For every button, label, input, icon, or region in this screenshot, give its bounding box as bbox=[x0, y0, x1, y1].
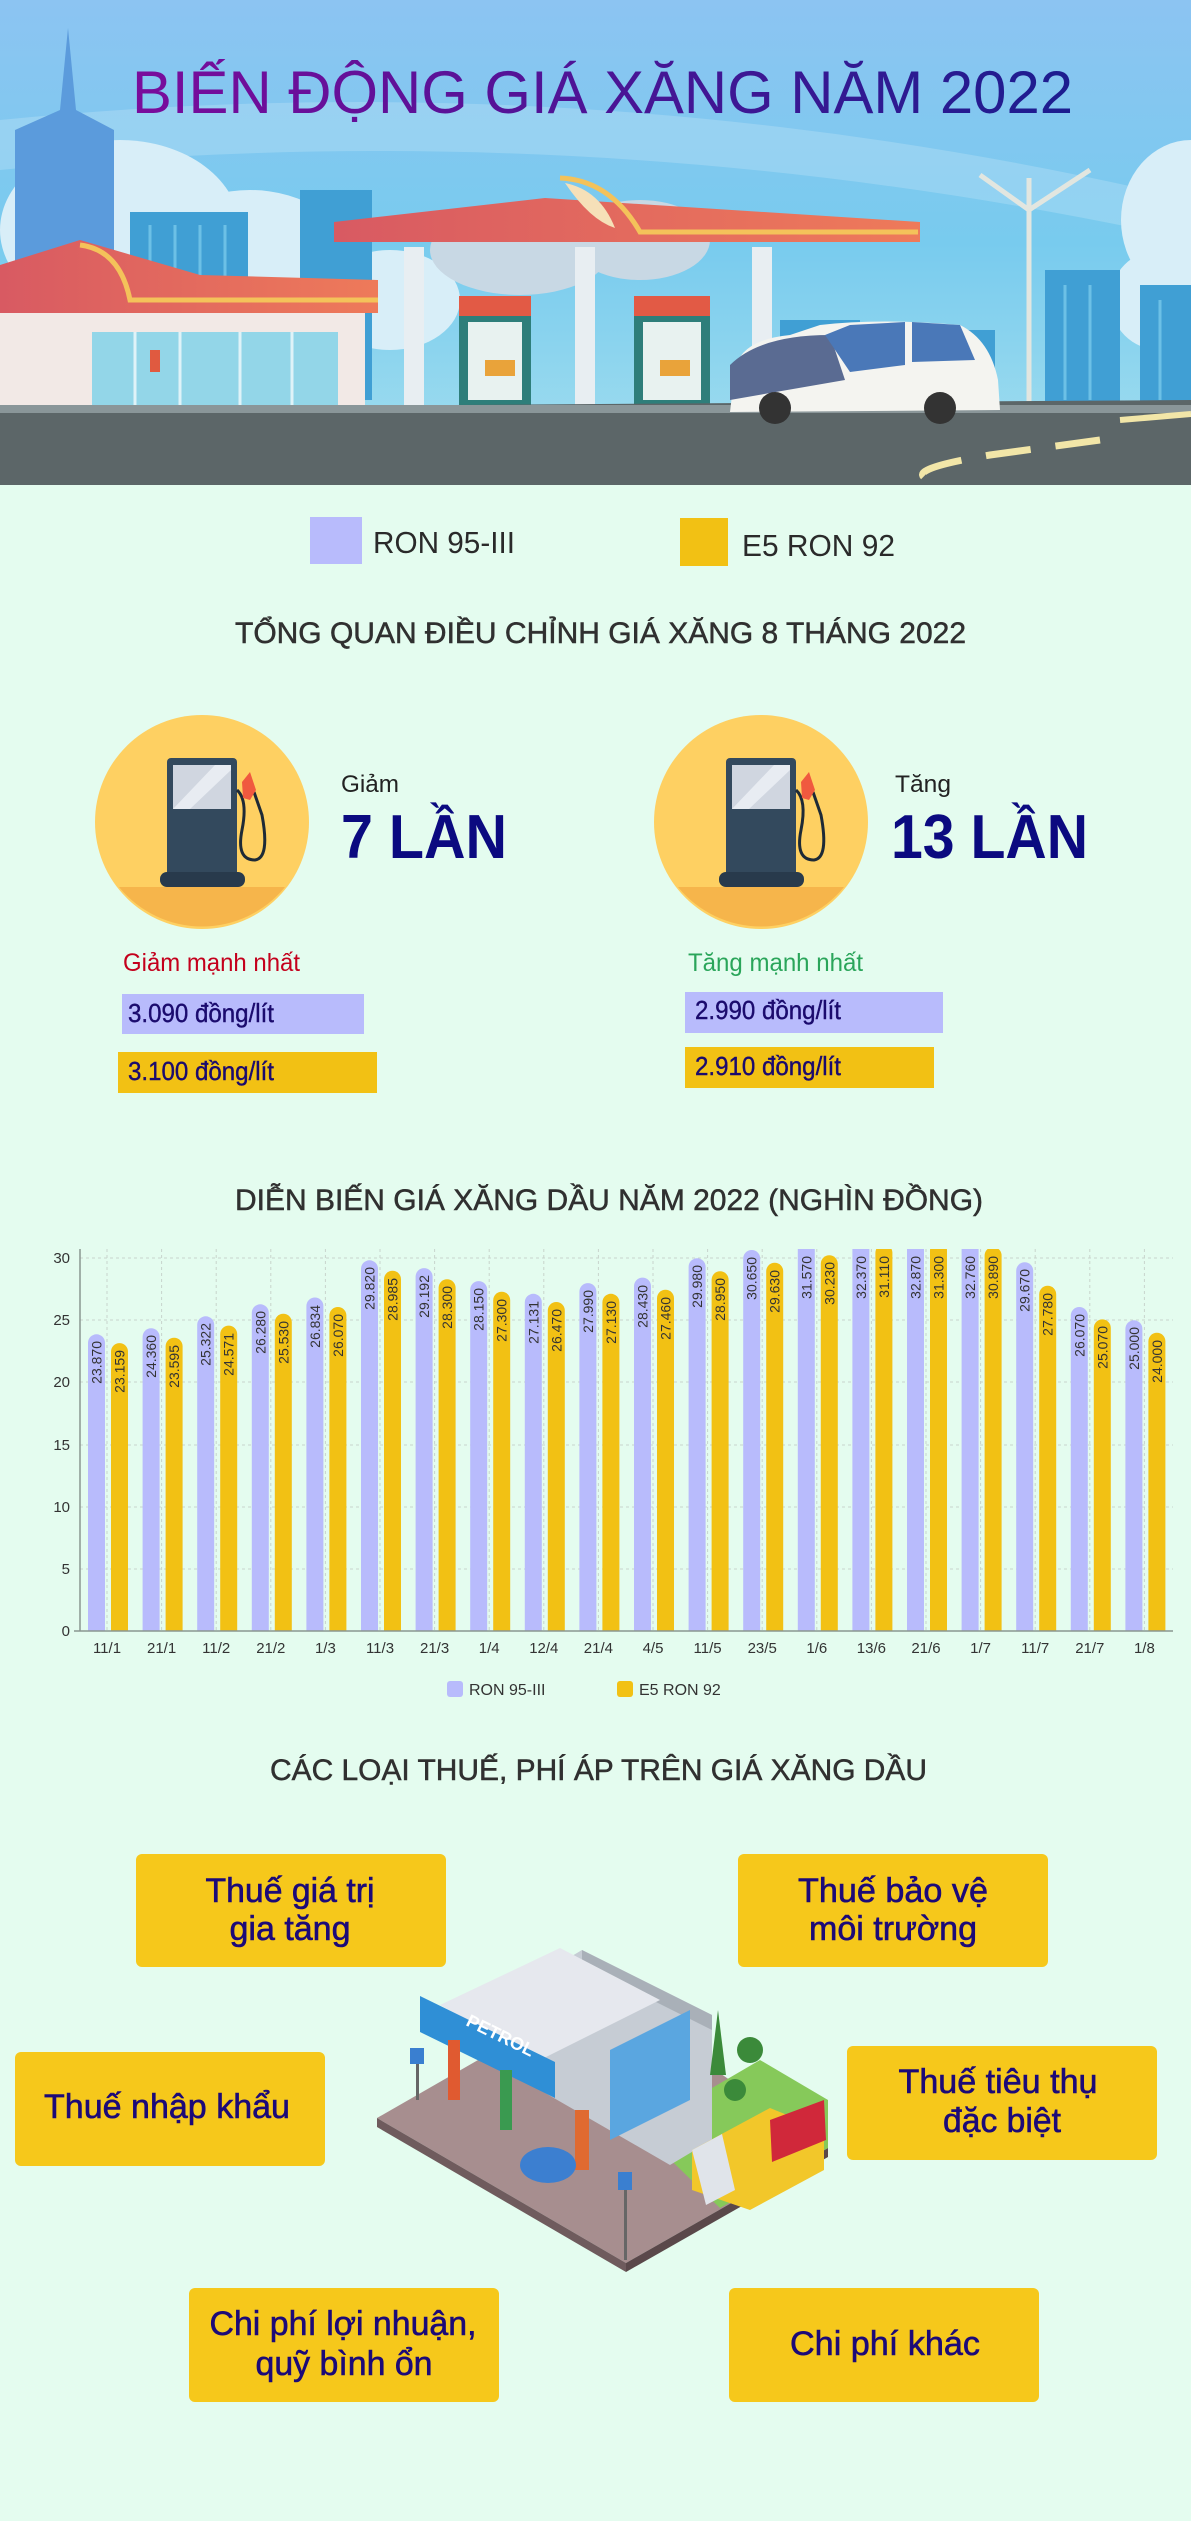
header illustration bbox=[0, 0, 1191, 487]
bar chart: 10 bbox=[53, 1499, 70, 1516]
illustration: isometric petrol station: PETROL bbox=[463, 2011, 538, 2061]
bar chart: 11/1 bbox=[93, 1640, 121, 1657]
icon: fuel pump (decrease) bbox=[95, 715, 309, 929]
bar chart: 23.159 bbox=[112, 1350, 128, 1393]
panel: increase: 2.910 đồng/lít bbox=[695, 1051, 842, 1081]
bar chart: 25 bbox=[53, 1312, 70, 1329]
callout: other costs: Chi phí khác bbox=[790, 2325, 980, 2363]
icon: fuel pump (increase) bbox=[654, 715, 868, 929]
bar chart: 4/5 bbox=[643, 1640, 663, 1657]
bar chart: 28.950 bbox=[712, 1278, 728, 1321]
bar chart: 11/2 bbox=[202, 1640, 230, 1657]
bar chart: 32.760 bbox=[962, 1256, 978, 1299]
callout: profit & stabilization fund: quỹ bình ổn bbox=[256, 2345, 432, 2383]
bar chart: 32.370 bbox=[853, 1256, 869, 1299]
bar chart: 12/4 bbox=[529, 1640, 558, 1657]
bar chart: 31.300 bbox=[930, 1256, 946, 1299]
bar chart: 29.670 bbox=[1017, 1269, 1033, 1312]
bar chart: 28.985 bbox=[384, 1278, 400, 1321]
bar chart: 23.870 bbox=[88, 1341, 104, 1384]
legend: RON 95-III bbox=[373, 525, 515, 560]
panel: decrease: Giảm mạnh nhất bbox=[123, 949, 300, 977]
chart legend bbox=[447, 1681, 721, 1699]
road bbox=[0, 400, 1191, 487]
bar chart: 21/3 bbox=[420, 1640, 449, 1657]
bar chart: 28.150 bbox=[471, 1288, 487, 1331]
bar chart: 30.230 bbox=[821, 1262, 837, 1305]
callout: import tax bbox=[15, 2052, 325, 2166]
bar chart: 13/6 bbox=[857, 1640, 886, 1657]
bar chart: 21/1 bbox=[147, 1640, 176, 1657]
callout: environment tax bbox=[738, 1854, 1048, 1967]
bar chart: 11/7 bbox=[1021, 1640, 1049, 1657]
bar chart: 11/3 bbox=[366, 1640, 394, 1657]
callout: environment tax: Thuế bảo vệ bbox=[798, 1872, 988, 1910]
bar chart: 11/5 bbox=[694, 1640, 722, 1657]
bar chart: 28.300 bbox=[439, 1286, 455, 1329]
bar chart: 29.192 bbox=[416, 1275, 432, 1318]
bar chart: 25.070 bbox=[1094, 1326, 1110, 1369]
bar chart: 29.630 bbox=[767, 1270, 783, 1313]
callout: special consumption tax: đặc biệt bbox=[943, 2102, 1062, 2140]
bar chart: 23/5 bbox=[748, 1640, 777, 1657]
bar chart: 32.870 bbox=[908, 1256, 924, 1299]
panel: decrease: 3.090 đồng/lít bbox=[128, 998, 275, 1028]
chart legend: E5 RON 92 bbox=[639, 1682, 721, 1699]
bar chart: 15 bbox=[53, 1437, 70, 1454]
heading: overview: TỔNG QUAN ĐIỀU CHỈNH GIÁ XĂNG 8 THÁNG 2022 bbox=[235, 616, 966, 650]
bar chart: 25.322 bbox=[198, 1323, 214, 1366]
bar chart: 1/3 bbox=[315, 1640, 336, 1657]
heading: chart: DIỄN BIẾN GIÁ XĂNG DẦU NĂM 2022 (NGHÌN ĐỒNG) bbox=[235, 1183, 983, 1217]
bar chart: 31.110 bbox=[876, 1256, 892, 1298]
bar chart: 0 bbox=[62, 1623, 70, 1640]
callout: VAT bbox=[136, 1854, 446, 1967]
panel: decrease: 3.100 đồng/lít bbox=[128, 1056, 275, 1086]
bar chart: 25.530 bbox=[275, 1321, 291, 1364]
bar chart: 24.360 bbox=[143, 1335, 159, 1378]
callout: profit & stabilization fund: Chi phí lợi nhuận, bbox=[210, 2305, 476, 2343]
bar chart: 5 bbox=[62, 1561, 70, 1578]
bar chart: 26.070 bbox=[330, 1314, 346, 1357]
bar chart: 27.300 bbox=[494, 1299, 510, 1342]
panel: increase: Tăng mạnh nhất bbox=[688, 949, 863, 977]
bar chart: 26.070 bbox=[1071, 1314, 1087, 1357]
panel: increase: 2.990 đồng/lít bbox=[695, 995, 842, 1025]
bar chart: 24.571 bbox=[221, 1333, 237, 1376]
bar chart: 27.131 bbox=[525, 1301, 541, 1344]
bar chart: 1/7 bbox=[970, 1640, 991, 1657]
bar chart: 27.780 bbox=[1040, 1293, 1056, 1336]
illustration: isometric petrol station bbox=[377, 1948, 828, 2272]
bar chart: 1/6 bbox=[806, 1640, 827, 1657]
bar chart: 27.460 bbox=[658, 1297, 674, 1340]
callout: profit & stabilization fund bbox=[189, 2288, 499, 2402]
callout: other costs bbox=[729, 2288, 1039, 2402]
title: BIẾN ĐỘNG GIÁ XĂNG NĂM 2022 bbox=[132, 59, 1073, 126]
bar chart: 27.990 bbox=[580, 1290, 596, 1333]
car bbox=[730, 322, 1000, 424]
bar chart: 1/4 bbox=[479, 1640, 500, 1657]
bar chart: 26.834 bbox=[307, 1305, 323, 1348]
panel: increase bbox=[654, 715, 1088, 1088]
bar chart: 26.280 bbox=[252, 1311, 268, 1354]
callout: environment tax: môi trường bbox=[809, 1910, 977, 1948]
legend: E5 RON 92 bbox=[742, 528, 895, 563]
callout: VAT: Thuế giá trị bbox=[206, 1872, 374, 1910]
chart legend: RON 95-III bbox=[469, 1682, 545, 1699]
bar chart: 28.430 bbox=[634, 1285, 650, 1328]
bar chart: 26.470 bbox=[548, 1309, 564, 1352]
bar chart: 30.890 bbox=[985, 1256, 1001, 1299]
bar chart: 23.595 bbox=[166, 1345, 182, 1388]
panel: increase: Tăng bbox=[895, 771, 951, 798]
bar chart: 29.820 bbox=[362, 1267, 378, 1310]
bar chart: 20 bbox=[53, 1374, 70, 1391]
bar chart: 21/2 bbox=[256, 1640, 285, 1657]
panel: increase: 13 LẦN bbox=[891, 803, 1088, 872]
left shop bbox=[0, 240, 378, 313]
bar chart: 31.570 bbox=[798, 1256, 814, 1299]
bar chart bbox=[53, 1222, 1173, 1699]
callout: special consumption tax: Thuế tiêu thụ bbox=[898, 2063, 1098, 2101]
heading: taxes: CÁC LOẠI THUẾ, PHÍ ÁP TRÊN GIÁ XĂNG DẦU bbox=[270, 1753, 927, 1787]
bar chart: 30 bbox=[53, 1250, 70, 1267]
bar chart: 27.130 bbox=[603, 1301, 619, 1344]
bar chart: 30.650 bbox=[744, 1257, 760, 1300]
panel: decrease: Giảm bbox=[341, 771, 399, 798]
bar chart: 21/4 bbox=[584, 1640, 613, 1657]
bar chart: 24.000 bbox=[1149, 1340, 1165, 1383]
bar chart: 1/8 bbox=[1134, 1640, 1155, 1657]
bar chart: 25.000 bbox=[1126, 1327, 1142, 1370]
bar chart: 21/7 bbox=[1075, 1640, 1104, 1657]
panel: decrease bbox=[95, 715, 507, 1093]
panel: decrease: 7 LẦN bbox=[341, 803, 507, 872]
callout: VAT: gia tăng bbox=[230, 1910, 350, 1948]
callout: import tax: Thuế nhập khẩu bbox=[44, 2088, 290, 2126]
bar chart: 21/6 bbox=[911, 1640, 941, 1657]
legend bbox=[310, 517, 895, 566]
bar chart: 29.980 bbox=[689, 1265, 705, 1308]
canopy bbox=[334, 198, 920, 242]
callout: special consumption tax bbox=[847, 2046, 1157, 2160]
pumps bbox=[459, 296, 710, 405]
